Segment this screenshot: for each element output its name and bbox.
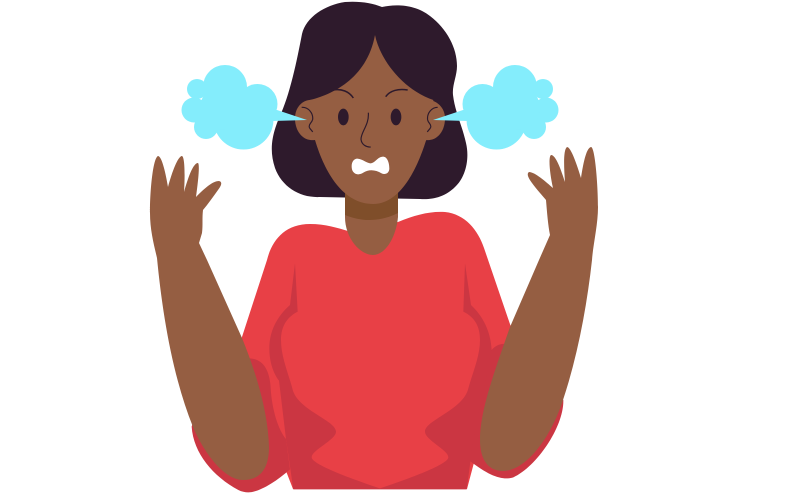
right eye — [391, 109, 401, 125]
nose — [361, 113, 371, 147]
left arm and hand — [150, 156, 269, 480]
face — [310, 35, 433, 204]
neck — [345, 190, 398, 255]
left ear — [295, 100, 327, 140]
left steam jet — [262, 105, 307, 130]
left eye — [338, 109, 349, 125]
steam cloud: left — [182, 65, 307, 150]
torso highlight — [281, 257, 480, 488]
head — [295, 35, 445, 204]
right sleeve shadow — [470, 344, 563, 478]
right ear — [413, 100, 445, 140]
steam cloud: right — [433, 65, 558, 150]
shirt — [241, 212, 512, 489]
shirt shadows — [192, 257, 563, 492]
right arm and hand — [480, 147, 598, 471]
neck shadow — [345, 190, 398, 220]
torso shadow — [269, 263, 492, 489]
right steam jet — [433, 105, 478, 130]
mouth — [352, 157, 389, 174]
right ear detail — [427, 107, 438, 132]
left ear detail — [302, 107, 313, 132]
hair — [272, 2, 467, 199]
right brow — [386, 89, 408, 97]
left brow — [333, 90, 353, 98]
left sleeve shadow — [192, 358, 290, 492]
